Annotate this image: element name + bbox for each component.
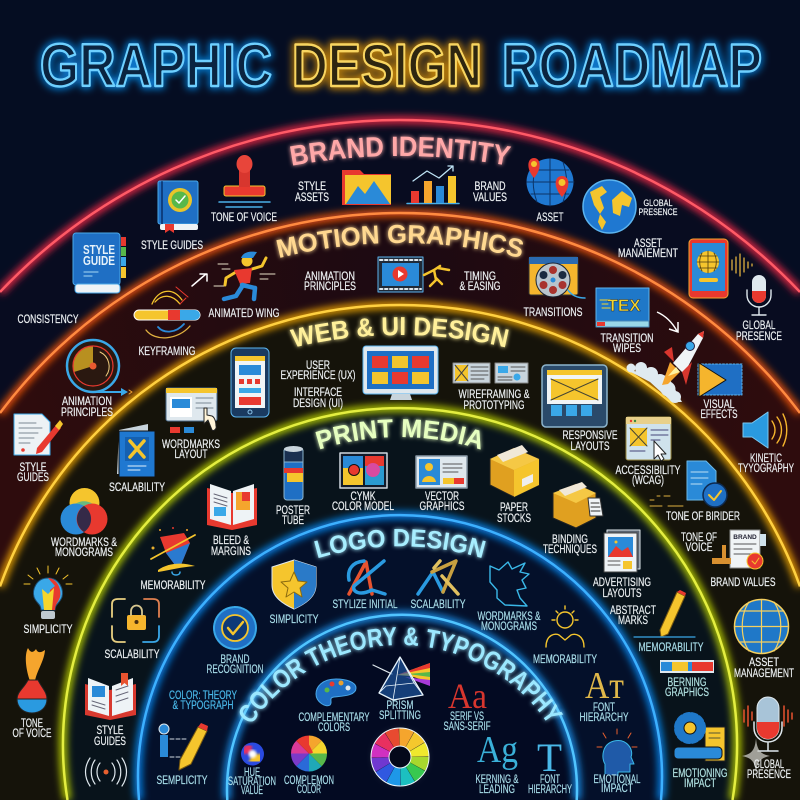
label: transition wipes [600,333,654,355]
label: vector graphics: VECTOR [425,491,459,503]
panel: logo design ring [138,515,662,800]
label: keyframing: KEYFRAMING [138,346,196,358]
icon: keyframing [134,287,200,338]
icon: head with idea [597,729,637,776]
label: cymk color model [332,491,394,513]
label: user experience: USER [306,360,330,372]
label: binding techniques: TECHNIQUES [543,544,597,556]
label: responsive layouts [562,430,618,453]
label: simplicity left: SIMPLICITY [24,624,73,636]
icon: lightbulb [24,566,72,619]
icon: person sun [546,606,584,647]
icon: speaker [743,412,787,448]
icon: cymk panel [340,453,387,488]
label: hue saturation value: SATURATION [228,776,276,788]
icon: pencil right [634,590,695,637]
label: emotional impact: IMPACT [601,783,633,795]
panel: motion graphics ring [0,213,800,800]
label: style guides lower [94,725,126,748]
label: transitions: TRANSITIONS [524,307,583,319]
label: kinetic typography: KINETIC [750,453,782,465]
label: vector graphics: GRAPHICS [420,501,465,513]
icon: play screen [698,363,742,397]
label: color theory and typography note [169,690,237,712]
label: style guides lower: GUIDES [94,736,126,748]
label: tone of voice left: TONE [21,718,43,730]
icon: hue ball [241,742,264,766]
icon: film strip and figure [378,257,449,292]
icon: dial [67,340,132,396]
icon: shipping box with tag [553,482,603,528]
label: global presence right: GLOBAL [742,320,776,332]
label: kinetic typography [738,453,794,475]
label: tone of voice: TONE OF VOICE [211,212,277,224]
icon: head silhouette [490,562,529,606]
label: wordmarks and monograms logo: WORDMARKS & [478,611,541,623]
label: style assets [295,181,329,204]
label: style guides left: GUIDES [17,472,49,484]
label: style guides lower: STYLE [96,725,124,737]
icon: serif aa: Aa [448,676,487,716]
label: user experience: EXPERIENCE (UX) [280,370,356,382]
label: global presence bottom: GLOBAL [754,759,784,771]
icon: film reel window [529,257,585,298]
label: tone of voice right [681,532,717,554]
label: binding techniques [543,534,597,556]
icon: monitor [363,346,438,400]
icon: poster tube [284,446,303,500]
icon: bar chart [407,166,459,204]
label: abstract marks: ABSTRACT [610,605,656,617]
icon: x logo mark [418,561,458,594]
label: cymk color model: CYMK [350,491,376,503]
icon: paint strokes [151,527,195,575]
label: complementary colors: COMPLEMENTARY [298,712,370,724]
icon: tex screen: TEX [607,296,641,315]
icon: serif t: T [537,735,562,780]
label: emotional impact [594,774,641,795]
label: font hierarchy lower: HIERARCHY [528,784,572,796]
label: accessibility [616,465,681,487]
label: asset management top: ASSET [634,238,662,250]
panel: web and ui design ring [0,305,800,800]
icon: prism [373,657,430,700]
label: wordmarks and monograms left: MONOGRAMS [55,547,113,559]
label: font hierarchy upper [580,702,629,724]
label: visual effects [700,399,738,421]
label: bleed and margins: MARGINS [211,546,251,558]
label: bleed and margins [211,535,251,558]
label: prism splitting [379,700,421,722]
label: scalability lower: SCALABILITY [104,649,160,661]
icon: serif ag: Ag [477,729,518,771]
label: berning graphics: GRAPHICS [665,687,709,699]
label: global presence bottom [747,759,791,781]
title: DESIGN [292,32,482,99]
label: global presence right [736,320,782,343]
label: emotioning impact: EMOTIONING [672,768,728,780]
label: brand values right: BRAND VALUES [710,577,776,589]
label: complemon color [284,775,334,796]
label: paper stocks [497,502,531,525]
label: global presence top: PRESENCE [638,207,678,217]
label: memorability logo: MEMORABILITY [533,654,597,666]
label: timing and easing: & EASING [460,281,501,293]
icon: document with check [650,461,727,507]
label: stylize initial: STYLIZE INITIAL [332,599,398,611]
label: style assets: ASSETS [295,192,329,204]
icon: microphone top [747,275,771,315]
icon: brand document with stamp: BRAND [733,534,757,541]
icon: radio waves [86,758,126,786]
label: binding techniques: BINDING [552,534,588,546]
icon: brand document with stamp [712,530,766,569]
icon: tablet globe [689,239,752,298]
label: color theory and typography note: COLOR: THEORY [169,690,237,702]
icon: open book print [207,484,257,530]
label: interface design: INTERFACE [294,387,342,399]
label: wireframing and prototyping [458,389,530,412]
icon: wireframes [453,363,528,383]
icon: accessibility layout [626,417,671,461]
label: tone of voice right: TONE OF [681,532,717,544]
label: scalability upper: SCALABILITY [109,482,165,494]
label: animation principles left [61,396,113,419]
icon: image folder [342,170,391,205]
label: asset management: ASSET [749,657,779,669]
icon: color wheel [371,728,429,786]
label: abstract marks: MARKS [618,615,648,627]
heading: web and ui design: WEB & UI DESIGN [287,314,512,350]
label: style guides: STYLE GUIDES [141,240,203,252]
icon: color venn [60,488,108,534]
panel: print media ring [63,408,737,800]
icon: microphone bottom [744,697,792,751]
label: simplicity logo: SIMPLICITY [270,614,319,626]
label: asset management [734,657,794,680]
label: tone of voice right: VOICE [686,542,713,554]
heading: print media: PRINT MEDIA [312,416,484,452]
label: prism splitting: PRISM [386,700,414,712]
label: memorability right: MEMORABILITY [638,642,704,654]
label: responsive layouts: LAYOUTS [570,441,610,453]
icon: responsive wireframe [542,365,607,427]
label: global presence right: PRESENCE [736,331,782,343]
label: wordmarks and monograms logo [478,611,541,633]
label: complementary colors [298,712,370,734]
label: paper stocks: STOCKS [497,513,531,525]
label: brand values: VALUES [473,192,507,204]
label: responsive layouts: RESPONSIVE [562,430,618,442]
icon: advertising sheet [604,530,640,572]
label: tone of voice left [12,718,52,740]
label: emotioning impact: IMPACT [684,778,716,790]
title: GRAPHIC [40,32,272,99]
title [40,32,762,99]
label: user experience [280,360,356,382]
panel: color theory ring [227,615,577,800]
title: DESIGN [292,32,482,99]
label: animated wing: ANIMATED WING [208,308,280,320]
label: kerning and leading [476,774,519,796]
label: wireframing and prototyping: PROTOTYPING [464,400,525,412]
icon: book with badge [158,181,198,233]
icon: globe with pins [526,158,574,206]
label: brand values: BRAND [474,181,506,193]
label: poster tube: POSTER [276,505,310,517]
label: accessibility: ACCESSIBILITY [616,465,681,477]
icon: blue book [117,424,155,477]
label: hue saturation value [228,767,276,797]
label: bleed and margins: BLEED & [213,535,249,547]
icon: pencil and ruler [159,723,208,770]
icon: running figure [192,252,275,299]
label: accessibility: (WCAG) [632,475,664,487]
label: brand recognition [206,654,264,676]
label: tone of voice left: OF VOICE [12,728,52,740]
label: tone of birider: TONE OF BIRIDER [666,511,740,523]
icon: complementary wheel [300,744,318,762]
label: berning graphics [665,677,709,699]
label: transition wipes: WIPES [613,343,641,355]
label: poster tube: TUBE [282,515,304,527]
label: style guides left: STYLE [20,462,47,474]
label: kerning and leading: LEADING [479,784,515,796]
icon: style guide book: STYLE [83,243,115,257]
heading: color theory and typography: COLOR THEORY & TYPOGRAPHY [236,624,565,725]
label: emotioning impact [672,768,728,790]
icon: style guide book: GUIDE [83,254,115,268]
label: wordmarks layout [162,439,220,461]
label: timing and easing: TIMING [464,271,496,283]
label: wordmarks layout: WORDMARKS [162,439,220,451]
label: kerning and leading: KERNING & [476,774,519,786]
label: abstract marks [610,605,656,627]
label: asset: ASSET [536,212,564,224]
label: scalability logo: SCALABILITY [410,599,466,611]
heading: brand identity: BRAND IDENTITY [287,133,514,169]
icon: phone [231,348,269,417]
label: global presence top [638,198,678,217]
label: complementary colors: COLORS [318,722,350,734]
label: serif vs sans-serif [444,711,490,733]
label: vector graphics [420,491,465,513]
label: consistency: CONSISTENCY [18,314,79,326]
label: paper stocks: PAPER [500,502,528,514]
label: advertising layouts [593,577,651,600]
icon: verified badge [214,607,256,649]
label: global presence top: GLOBAL [644,198,672,208]
icon: paint vial [17,648,47,713]
icon: grid globe [734,600,788,654]
icon: style guide book [73,233,126,293]
label: brand recognition: RECOGNITION [206,664,264,676]
label: asset management top: MANAIEMENT [618,248,678,260]
label: animation principles left: PRINCIPLES [61,407,113,419]
label: hue saturation value: VALUE [241,785,263,797]
label: timing and easing [460,271,501,293]
label: memorability left: MEMORABILITY [140,580,206,592]
label: animation principles center [304,271,356,293]
label: serif vs sans-serif: SANS-SERIF [444,721,490,733]
icon: paper box [490,445,539,497]
label: emotional impact: EMOTIONAL [594,774,641,786]
label: berning graphics: BERNING [668,677,707,689]
icon: color bar [660,660,714,673]
icon: stylized initial [349,561,385,594]
icon: earth globe [583,180,636,233]
label: complemon color: COMPLEMON [284,775,334,787]
label: semplicity: SEMPLICITY [156,775,208,787]
label: wordmarks and monograms logo: MONOGRAMS [481,621,537,633]
label: poster tube [276,505,310,527]
label: advertising layouts: LAYOUTS [602,588,642,600]
label: visual effects: VISUAL [704,399,735,411]
label: font hierarchy upper: FONT [593,702,615,714]
label: complemon color: COLOR [297,784,321,796]
label: font hierarchy lower [528,774,572,796]
label: animation principles left: ANIMATION [62,396,112,408]
icon: open book guides [85,673,136,720]
label: wordmarks and monograms left: WORDMARKS & [51,537,117,549]
icon: sparkle watermark [742,738,770,773]
label: style assets: STYLE [298,181,326,193]
icon: palette [316,679,356,706]
icon: serif at: Aт [585,665,624,707]
label: visual effects: EFFECTS [700,409,738,421]
icon: web layout with cursor [166,388,217,433]
label: interface design: DESIGN (UI) [293,398,343,410]
label: font hierarchy upper: HIERARCHY [580,712,629,724]
label: serif vs sans-serif: SERIF VS [450,711,484,723]
label: animation principles center: ANIMATION [305,271,355,283]
label: style guides left [17,462,49,484]
heading: motion graphics: MOTION GRAPHICS [274,222,526,260]
icon: vector card [416,456,467,488]
label: font hierarchy lower: FONT [540,774,560,786]
icon: document and pencil [14,414,63,455]
icon: stamp [219,155,270,207]
label: color theory and typography note: & TYPOGRAPH [172,700,234,712]
label: wireframing and prototyping: WIREFRAMING & [458,389,530,401]
label: cymk color model: COLOR MODEL [332,501,394,513]
icon: gear and folder [674,715,725,761]
icon: shield star [272,560,316,609]
arrow: to rocket [657,312,678,332]
icon: rocket [626,331,704,403]
label: asset management top [618,238,678,260]
label: wordmarks and monograms left [51,537,117,559]
label: interface design [293,387,343,410]
label: animation principles center: PRINCIPLES [304,281,356,293]
label: brand values [473,181,507,204]
label: transition wipes: TRANSITION [600,333,654,345]
label: advertising layouts: ADVERTISING [593,577,651,589]
heading: logo design: LOGO DESIGN [311,526,488,561]
title: GRAPHIC [40,32,272,99]
label: brand recognition: BRAND [220,654,250,666]
icon: tex screen [596,288,649,327]
label: prism splitting: SPLITTING [379,710,421,722]
label: hue saturation value: HUE [244,767,260,779]
icon: lock focus [112,599,159,642]
label: wordmarks layout: LAYOUT [174,449,208,461]
